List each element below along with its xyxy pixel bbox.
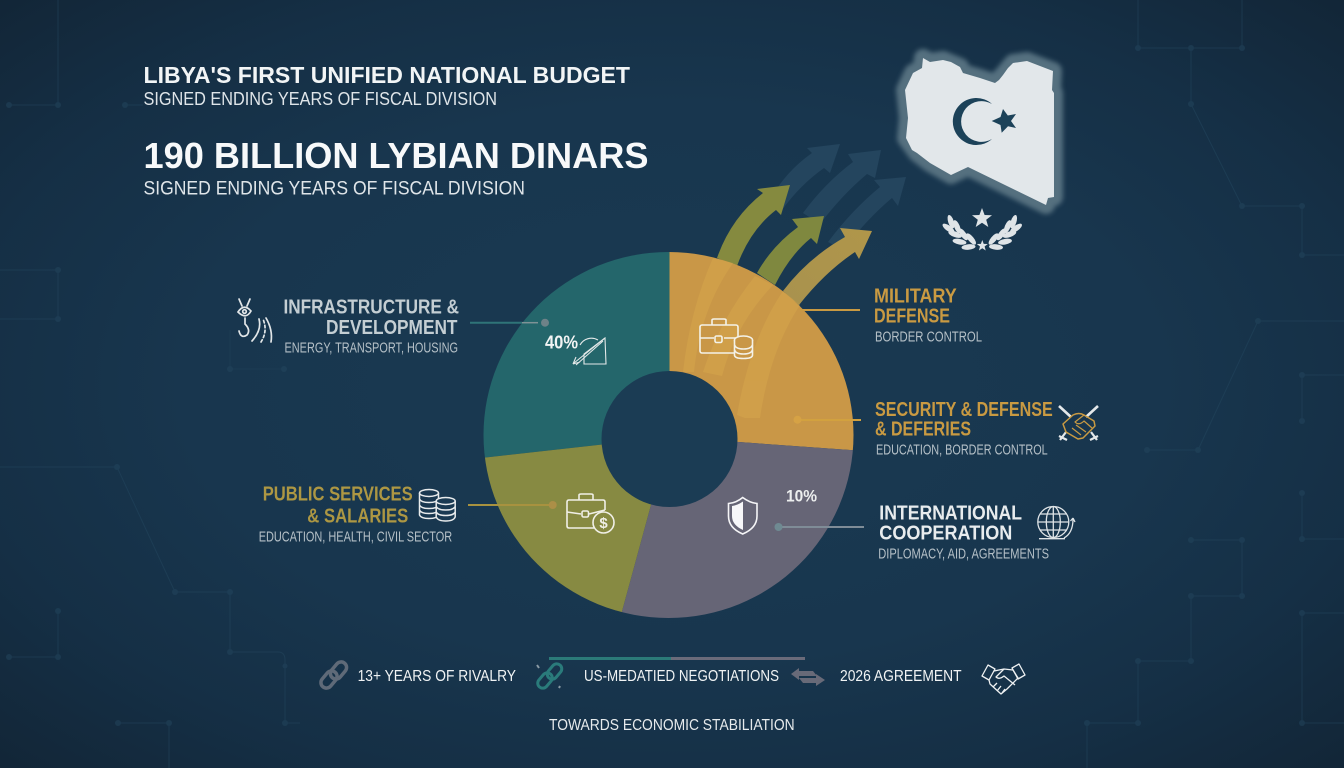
header text block bbox=[144, 62, 648, 200]
arrow: olive 1 bbox=[717, 185, 790, 266]
timeline strip bbox=[319, 657, 1025, 694]
emblem: star and laurel wreath bbox=[941, 208, 1023, 250]
label: international cooperation bbox=[878, 502, 1075, 562]
closing line: TOWARDS ECONOMIC STABILIATION bbox=[549, 717, 795, 734]
chart value: 40%: 40% bbox=[545, 333, 578, 353]
faded background arrows bbox=[770, 144, 906, 250]
heading line 2: DEFENSE bbox=[874, 306, 950, 328]
chart value: 10%: 10% bbox=[786, 487, 817, 506]
leader: military bbox=[800, 309, 860, 311]
crescent bbox=[953, 98, 992, 145]
heading line 2: COOPERATION bbox=[879, 522, 1012, 544]
map of Libya with crescent and star bbox=[905, 58, 1054, 205]
leader lines and dots bbox=[468, 310, 864, 531]
icon: briefcase and coins bbox=[700, 319, 752, 358]
map shape bbox=[905, 58, 1054, 205]
icon: handshake bbox=[982, 664, 1025, 694]
icon: handshake with crossed swords bbox=[1059, 406, 1098, 440]
heading: MILITARY bbox=[874, 285, 957, 307]
label: public services and salaries bbox=[259, 484, 455, 546]
icon: globe bbox=[1038, 506, 1075, 539]
arrow continuation bands bbox=[683, 258, 800, 418]
arrow: olive 2 bbox=[757, 216, 824, 285]
label: military defense bbox=[874, 285, 982, 345]
step: agreement: 2026 AGREEMENT bbox=[840, 668, 962, 685]
icon: grey chain link bbox=[319, 660, 349, 690]
icon: crane hook and road bbox=[238, 299, 271, 342]
icon: briefcase and dollar: $ bbox=[599, 515, 608, 532]
description: DIPLOMACY, AID, AGREEMENTS bbox=[878, 546, 1049, 562]
description: BORDER CONTROL bbox=[875, 329, 982, 345]
budget subtitle: SIGNED ENDING YEARS OF FISCAL DIVISION bbox=[144, 178, 525, 200]
heading line 2: DEVELOPMENT bbox=[326, 317, 458, 339]
leader: security bbox=[794, 416, 861, 424]
step: negotiations: US-MEDATIED NEGOTIATIONS bbox=[584, 668, 779, 685]
slice: olive public services bbox=[485, 444, 651, 612]
arrow: gold 3 bbox=[783, 228, 872, 305]
donut hole bbox=[602, 371, 738, 507]
icon: house and arrow on teal slice bbox=[573, 338, 606, 365]
description: EDUCATION, BORDER CONTROL bbox=[876, 442, 1048, 458]
donut chart bbox=[484, 252, 854, 618]
arrow: faded 1 bbox=[770, 144, 840, 210]
progress bar bbox=[549, 657, 805, 660]
heading: PUBLIC SERVICES bbox=[263, 484, 413, 506]
description: ENERGY, TRANSPORT, HOUSING bbox=[284, 341, 458, 357]
heading: INFRASTRUCTURE & bbox=[284, 296, 459, 318]
arrow: faded 3 bbox=[828, 177, 906, 250]
icon: exchange arrows bbox=[791, 668, 825, 686]
arrow: faded 2 bbox=[803, 150, 881, 224]
heading line 2: & DEFERIES bbox=[875, 419, 971, 441]
leader: infrastructure bbox=[470, 319, 549, 327]
subtitle: SIGNED ENDING YEARS OF FISCAL DIVISION bbox=[144, 89, 497, 109]
label: security and defense bbox=[875, 399, 1098, 458]
description: EDUCATION, HEALTH, CIVIL SECTOR bbox=[259, 530, 452, 546]
slice: teal infrastructure bbox=[484, 252, 670, 458]
rising arrows bbox=[717, 185, 872, 305]
slice: gold military and security bbox=[670, 252, 854, 450]
heading: INTERNATIONAL bbox=[879, 502, 1022, 524]
leader: cooperation bbox=[774, 523, 864, 531]
step: rivalry: 13+ YEARS OF RIVALRY bbox=[358, 668, 516, 685]
icon: teal chain link bbox=[536, 662, 564, 690]
star bbox=[992, 109, 1016, 133]
heading line 2: & SALARIES bbox=[307, 505, 408, 527]
icon: shield bbox=[728, 498, 757, 534]
label: infrastructure and development bbox=[238, 296, 459, 357]
heading: SECURITY & DEFENSE bbox=[875, 399, 1053, 421]
slice: grey cooperation bbox=[622, 442, 853, 618]
map glow bbox=[905, 58, 1054, 205]
budget figure: 190 BILLION LYBIAN DINARS bbox=[144, 135, 648, 176]
icon: briefcase and dollar bbox=[567, 494, 614, 533]
title: LIBYA'S FIRST UNIFIED NATIONAL BUDGET bbox=[144, 62, 630, 88]
leader: public services bbox=[468, 501, 557, 509]
icon: coin stacks bbox=[420, 490, 455, 521]
